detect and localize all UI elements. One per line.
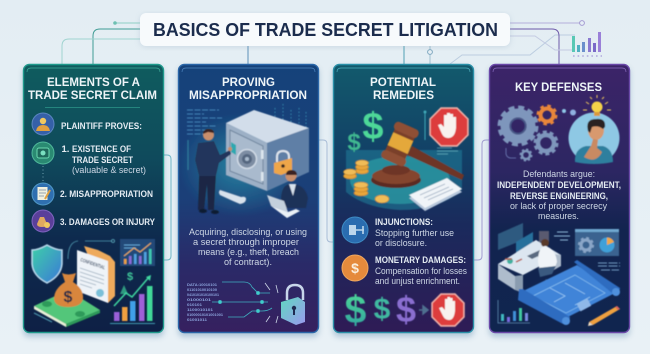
- icon: dollar and triangle: $: [127, 271, 133, 283]
- binary data stream: 1100010101: [187, 308, 213, 312]
- heading: TRADE SECRET CLAIM: [28, 88, 157, 102]
- icon: medium gear: [535, 132, 557, 154]
- text: item 1: (valuable & secret): [72, 165, 146, 176]
- heading: ELEMENTS OF A: [47, 75, 140, 89]
- icon: cash stack: [34, 290, 100, 327]
- heading: [189, 75, 307, 102]
- icon: existence of secret: [32, 142, 54, 164]
- illustration: gears and thinking person: [500, 95, 620, 164]
- icon: misappropriation: [32, 183, 54, 205]
- title banner: BASICS OF TRADE SECRET LITIGATION: [153, 20, 498, 40]
- icon: safe: [226, 110, 309, 191]
- binary data stream: 01000101: [187, 298, 211, 302]
- text: item 1: 1.: [62, 144, 69, 155]
- illustration: gavel, coins, stop sign and document: [344, 106, 468, 211]
- text: plaintiff proves: PLAINTIFF PROVES:: [61, 121, 142, 132]
- text: monetary damages: Compensation for losses: [375, 266, 467, 277]
- illustration: shield, document, money and charts: [32, 239, 155, 327]
- text: injunctions: Stopping further use: [375, 228, 454, 239]
- text: monetary damages: MONETARY DAMAGES:: [375, 255, 466, 266]
- text: item 3: 3. DAMAGES OR INJURY: [60, 217, 156, 228]
- icon: large gear: [500, 108, 536, 144]
- text: defendants argue: measures.: [538, 211, 579, 222]
- title banner: [140, 13, 510, 47]
- icon: gavel: [371, 120, 464, 188]
- icon row: dollars and stop sign: $: [374, 293, 391, 326]
- illustration: safe and two people: [178, 104, 309, 218]
- text: defendants argue: [497, 169, 621, 222]
- binary data stream: 01000010101001001: [187, 313, 223, 317]
- icon: pencil: [588, 306, 620, 326]
- text: description: of contract).: [224, 257, 272, 268]
- circuit lines: [212, 282, 278, 323]
- text: description: [189, 227, 307, 268]
- figure: man at safe: [195, 129, 232, 214]
- icon: key: [219, 190, 246, 204]
- binary data stream: 0410101010100101: [187, 293, 219, 297]
- binary data stream: [187, 283, 223, 322]
- binary data stream: 01001011: [187, 318, 207, 322]
- icon: confidential document: CONFIDENTIAL: [79, 257, 106, 271]
- icon: stop hand sign: [430, 108, 468, 146]
- heading: [370, 75, 436, 102]
- figure: seated man and laptop: [267, 170, 308, 218]
- icon: light bulb: [583, 95, 611, 116]
- heading: REMEDIES: [373, 88, 434, 102]
- icon: money bag: $: [64, 289, 73, 306]
- icon: digital lock: [281, 285, 305, 325]
- text: injunctions: INJUNCTIONS:: [375, 217, 433, 228]
- icon: small gear: [520, 150, 532, 160]
- icon: damages: [32, 210, 54, 232]
- text: defendants argue: REVERSE ENGINEERING,: [510, 191, 608, 202]
- panel: key defenses: [489, 64, 630, 337]
- small bar chart: [498, 300, 530, 323]
- text: defendants argue: Defendants argue:: [523, 169, 595, 180]
- text: monetary damages: and unjust enrichment.: [375, 276, 460, 287]
- text: defendants argue: or lack of proper secrecy: [510, 201, 607, 212]
- panel: elements of a trade secret claim: [23, 64, 164, 337]
- text: item 1: TRADE SECRET: [72, 155, 133, 166]
- heading: POTENTIAL: [370, 75, 436, 89]
- heading: KEY DEFENSES: [515, 80, 602, 94]
- binary data stream: DATA:10010101: [187, 283, 217, 287]
- text: defendants argue: INDEPENDENT DEVELOPMENT,: [497, 180, 621, 191]
- binary data stream: 010101: [187, 303, 202, 307]
- panel: proving misappropriation: [178, 64, 319, 337]
- icon: legal document: [409, 178, 462, 211]
- panel: potential remedies: [333, 64, 474, 337]
- icon: injunction: [342, 217, 368, 243]
- icon: gear and pie card: [575, 229, 619, 256]
- text: description: means (e.g., theft, breach: [198, 247, 299, 258]
- icon: monetary damages: $: [351, 260, 359, 276]
- icon: orange gear: [538, 106, 556, 124]
- icon: monetary damages: [342, 255, 368, 281]
- icon row: dollars and stop sign: $: [396, 289, 416, 330]
- bar chart: [110, 275, 155, 324]
- small decorative bar chart icon: [572, 32, 602, 56]
- illustration: gavel, coins, stop sign and document: $: [347, 129, 361, 156]
- illustration: lab desk, blueprint and charts: [498, 223, 620, 326]
- icon: chart card: [120, 239, 155, 266]
- icon: blueprint: [518, 260, 620, 325]
- heading: [28, 75, 157, 102]
- icon row: dollars and stop sign: [345, 289, 464, 332]
- icon: coin stacks: [344, 160, 389, 203]
- binary data stream: 01101010010100: [187, 288, 217, 292]
- icon: shield: [32, 245, 62, 283]
- text: injunctions: [375, 217, 454, 249]
- heading: MISAPPROPRIATION: [189, 88, 307, 102]
- text: item 1: EXISTENCE OF: [72, 144, 131, 155]
- text: description: a secret through improper: [193, 237, 299, 248]
- text: monetary damages: [375, 255, 467, 287]
- icon: lab desk and engineer: [498, 223, 561, 293]
- text: description: Acquiring, disclosing, or using: [189, 227, 307, 238]
- connector lines: [62, 21, 584, 260]
- heading: PROVING: [222, 75, 275, 89]
- icon row: dollars and stop sign: $: [345, 289, 367, 332]
- icon: dollar signs: $: [362, 106, 384, 148]
- text: item 2: 2. MISAPPROPRIATION: [60, 189, 153, 200]
- text: injunctions: or disclosure.: [375, 238, 427, 249]
- icon: padlock: [274, 151, 292, 175]
- icon: thinking person: [568, 112, 620, 164]
- icon: plaintiff: [32, 113, 54, 135]
- text: item 1: [62, 144, 146, 176]
